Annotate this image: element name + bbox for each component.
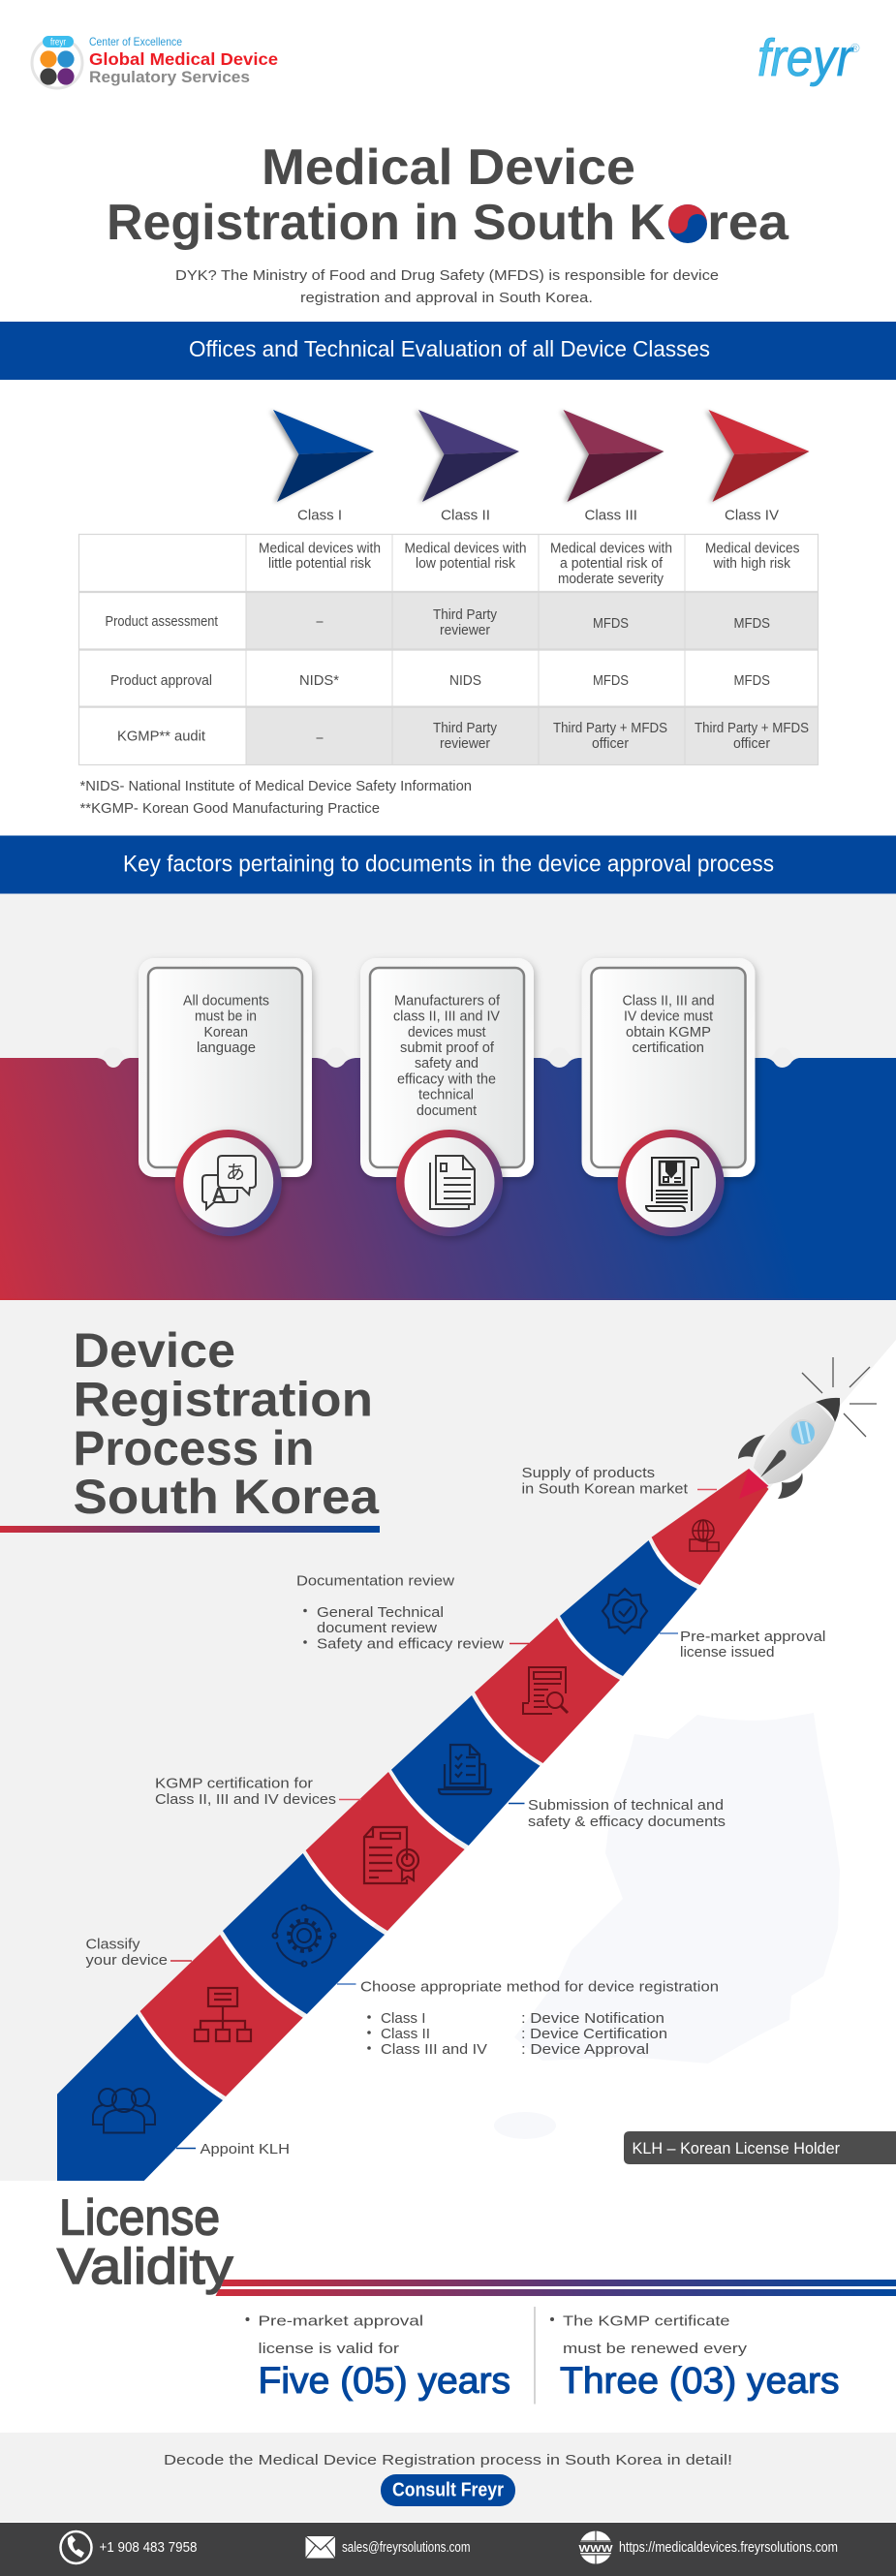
text block: pre-market approval validity: Pre-market approval — [258, 2313, 423, 2329]
table: device classes: NIDS — [449, 672, 481, 689]
heading: device registration process: Registration — [74, 1372, 373, 1426]
label: KGMP certification — [155, 1775, 361, 1808]
arrow: class II — [418, 410, 519, 502]
arrow: class I — [273, 410, 374, 502]
label: choose method: Class III and IV — [381, 2041, 487, 2058]
ribbon: process steps — [57, 1469, 769, 2181]
label: documentation review: document review — [317, 1620, 437, 1636]
intro text: registration and approval in South Korea. — [300, 290, 593, 306]
table: device classes: MFDS — [593, 615, 629, 632]
text block: KGMP certificate validity: The KGMP certificate — [563, 2313, 730, 2329]
panel: KGMP certification: obtain KGMP — [626, 1024, 711, 1040]
table: device classes: reviewer — [440, 735, 490, 752]
class arrows: Class IV — [725, 508, 779, 523]
heading: device registration process — [74, 1323, 380, 1524]
panel: proof of safety and efficacy: document — [417, 1102, 478, 1119]
rocket rays — [802, 1357, 877, 1437]
table: device classes — [78, 534, 819, 765]
icon: phone — [60, 2531, 91, 2563]
heading: license validity — [57, 2189, 232, 2295]
step: submission — [391, 1695, 541, 1846]
logo: freyr: ® — [850, 41, 860, 55]
panel: Korean language: must be in — [195, 1009, 257, 1025]
label: choose method: : Device Approval — [521, 2041, 649, 2058]
map: South Korea watermark — [494, 1713, 840, 2139]
table: device classes: reviewer — [440, 622, 490, 638]
table: device classes: Third Party — [433, 606, 497, 623]
text block: pre-market approval validity: Five (05) years — [258, 2361, 510, 2402]
table: device classes: Medical devices with — [550, 541, 672, 557]
text block: pre-market approval validity — [246, 2313, 510, 2402]
gradient band — [0, 1058, 896, 1300]
stripes — [215, 2280, 896, 2296]
icon circle: translate: あ — [226, 1163, 245, 1184]
footer: https://medicaldevices.freyrsolutions.com — [619, 2540, 838, 2556]
label: documentation review: General Technical — [317, 1604, 444, 1621]
footer: +1 908 483 7958 — [99, 2540, 198, 2556]
panel: proof of safety and efficacy: efficacy with the — [397, 1071, 496, 1087]
title: Medical Device — [262, 140, 635, 196]
panel: Korean language: Korean — [203, 1024, 248, 1040]
table: device classes: officer — [592, 735, 629, 752]
icon circle: translate — [175, 1130, 282, 1236]
label: pre-market approval issued: license issued — [680, 1644, 775, 1660]
arrow: class III — [564, 410, 664, 502]
table: device classes: – — [316, 613, 324, 630]
table: device classes: Third Party + MFDS — [695, 720, 809, 736]
table: device classes: Third Party + MFDS — [553, 720, 667, 736]
button: consult freyr: Consult Freyr — [392, 2480, 504, 2501]
label: documentation review: Documentation review — [296, 1573, 454, 1589]
logo: freyr: freyr — [757, 29, 854, 87]
table: device classes: Medical devices — [705, 541, 800, 557]
gradient divider — [0, 1298, 896, 1300]
step: classify — [139, 1935, 303, 2096]
text block: pre-market approval validity: license is valid for — [258, 2341, 399, 2357]
panel: proof of safety and efficacy: technical — [418, 1087, 474, 1102]
table: device classes: Third Party — [433, 720, 497, 736]
icon circle: document — [396, 1130, 503, 1236]
panel: Korean language — [139, 958, 312, 1236]
label: documentation review — [296, 1573, 529, 1653]
callout: KLH definition: KLH – Korean License Holder — [632, 2139, 840, 2157]
label: choose method: : Device Certification — [521, 2026, 667, 2042]
table: device classes: MFDS — [734, 615, 770, 632]
heading: license validity: License — [59, 2189, 220, 2246]
button: consult freyr — [381, 2474, 515, 2506]
step: appoint KLH — [57, 2014, 223, 2181]
section background: key factors — [0, 893, 896, 1300]
title: Registration in South K — [107, 195, 665, 251]
label: choose method — [337, 1978, 719, 2058]
banner: key factors — [0, 835, 896, 893]
intro text — [175, 267, 719, 306]
title — [107, 140, 789, 251]
table: device classes: NIDS* — [299, 672, 339, 689]
banner: offices and technical evaluation: Offices and Technical Evaluation of all Device Classes — [189, 336, 710, 361]
table: device classes: little potential risk — [268, 555, 371, 572]
label: choose method: Choose appropriate method for device registration — [360, 1978, 719, 1996]
icon: globe www — [578, 2530, 613, 2563]
table: device classes: MFDS — [734, 672, 770, 689]
label: documentation review: Safety and efficacy review — [317, 1635, 504, 1653]
panel: Korean language: language — [197, 1040, 256, 1056]
footnotes: *NIDS- National Institute of Medical Device Safety Information — [79, 778, 472, 794]
step: KGMP certification — [306, 1772, 465, 1931]
class arrows — [273, 410, 810, 523]
banner: offices and technical evaluation — [0, 322, 896, 380]
panel: proof of safety and efficacy — [360, 958, 534, 1236]
label: supply of products: Supply of products — [521, 1465, 655, 1481]
heading underline — [0, 1526, 380, 1533]
callout: KLH definition — [624, 2131, 896, 2164]
panel: proof of safety and efficacy: class II, III and IV — [393, 1009, 500, 1025]
label: submission of documents: safety & efficacy documents — [528, 1814, 726, 1830]
step: supply — [652, 1469, 769, 1585]
panel: KGMP certification: Class II, III and — [622, 993, 715, 1009]
table: device classes: a potential risk of — [560, 555, 664, 572]
heading: license validity: Validity — [57, 2239, 232, 2295]
divider — [535, 2307, 536, 2405]
step: pre-market approval — [560, 1540, 697, 1676]
call to action: Decode the Medical Device Registration process in South Korea in detail! — [164, 2452, 732, 2468]
label: supply of products — [521, 1465, 717, 1498]
title: rea — [707, 195, 789, 251]
table: device classes: Medical devices with — [259, 541, 381, 557]
label: classify — [85, 1936, 192, 1969]
label: submission of documents: Submission of technical and — [528, 1797, 724, 1814]
label: pre-market approval issued — [660, 1629, 825, 1660]
label: classify: Classify — [85, 1936, 140, 1953]
table: device classes: low potential risk — [416, 555, 515, 572]
label: classify: your device — [85, 1952, 168, 1969]
label: pre-market approval issued: Pre-market approval — [680, 1629, 825, 1645]
logo: Global Medical Device Regulatory Services: Regulatory Services — [89, 68, 250, 86]
call to action — [0, 2433, 896, 2522]
label: choose method: Class II — [381, 2026, 430, 2042]
icon: globe www: WWW — [579, 2543, 613, 2555]
table: device classes: Product assessment — [105, 613, 219, 630]
icon circle: translate: A — [212, 1185, 226, 1206]
panel: proof of safety and efficacy: safety and — [415, 1055, 479, 1071]
table: device classes: MFDS — [593, 672, 629, 689]
logo: Global Medical Device Regulatory Services: Center of Excellence — [89, 35, 182, 48]
section background: process — [0, 1300, 896, 2181]
panel: proof of safety and efficacy: Manufacturers of — [394, 993, 501, 1009]
arrow: class IV — [709, 410, 810, 502]
footer: sales@freyrsolutions.com — [342, 2540, 471, 2556]
heading: device registration process: South Korea — [74, 1470, 380, 1524]
logo: Global Medical Device Regulatory Services: freyr — [50, 37, 67, 48]
heading: device registration process: Process in — [74, 1421, 314, 1475]
class arrows: Class I — [297, 508, 342, 523]
footnotes — [79, 778, 472, 817]
class arrows: Class III — [585, 508, 637, 523]
panel: proof of safety and efficacy: devices must — [408, 1024, 486, 1040]
table: device classes: officer — [733, 735, 770, 752]
panel: KGMP certification: IV device must — [624, 1009, 714, 1025]
table: device classes: KGMP** audit — [117, 729, 206, 744]
heading: device registration process: Device — [74, 1323, 235, 1378]
footnotes: **KGMP- Korean Good Manufacturing Practice — [79, 800, 380, 817]
panel: KGMP certification: certification — [632, 1040, 704, 1056]
table: device classes: Medical devices with — [405, 541, 527, 557]
label: KGMP certification: KGMP certification for — [155, 1775, 313, 1792]
label: choose method: : Device Notification — [521, 2010, 664, 2027]
intro text: DYK? The Ministry of Food and Drug Safety (MFDS) is responsible for device — [175, 267, 719, 284]
panel: KGMP certification — [581, 958, 756, 1236]
table: device classes: Product approval — [110, 672, 212, 689]
banner: key factors: Key factors pertaining to documents in the device approval process — [123, 851, 774, 878]
label: supply of products: in South Korean market — [521, 1480, 689, 1498]
label: KGMP certification: Class II, III and IV devices — [155, 1791, 336, 1808]
connector bumps — [97, 1047, 799, 1068]
logo: Global Medical Device Regulatory Services — [32, 35, 278, 88]
table: device classes: – — [316, 729, 324, 746]
icon: envelope — [306, 2536, 335, 2558]
step: documentation review — [475, 1618, 620, 1763]
label: choose method: Class I — [381, 2010, 426, 2027]
label: appoint KLH: Appoint KLH — [200, 2141, 290, 2157]
icon: taegeuk o — [668, 204, 707, 243]
step: choose method — [223, 1853, 385, 2014]
footer — [0, 2523, 896, 2576]
text block: KGMP certificate validity — [550, 2313, 839, 2402]
icon circle: certificate scroll — [618, 1130, 725, 1236]
text block: KGMP certificate validity: must be renewed every — [563, 2341, 748, 2357]
label: submission of documents — [509, 1797, 726, 1830]
logo: Global Medical Device Regulatory Services: Global Medical Device — [89, 49, 278, 69]
panel: Korean language: All documents — [183, 993, 269, 1009]
table: device classes: with high risk — [713, 555, 790, 572]
rocket — [738, 1357, 877, 1499]
panel: proof of safety and efficacy: submit proof of — [400, 1040, 495, 1056]
table: device classes: moderate severity — [558, 571, 664, 587]
class arrows: Class II — [441, 508, 490, 523]
text block: KGMP certificate validity: Three (03) years — [560, 2361, 839, 2402]
rocket exhaust — [739, 1469, 769, 1499]
